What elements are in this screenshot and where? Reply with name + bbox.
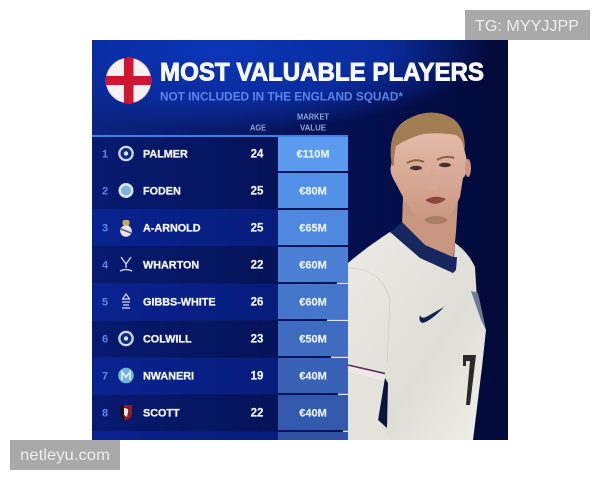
neck [402,195,458,262]
row 6: Colwill [102,331,327,346]
shirt [348,232,486,440]
row 6: Colwill: 23 [251,334,263,346]
row 3: A-Arnold: A-ARNOLD [143,222,201,234]
row 8: Scott: €40M [299,408,327,420]
panel: infographic background [92,40,508,440]
gap between arm and torso [378,378,388,428]
row 4: Wharton [102,257,327,272]
chin beard [425,216,447,224]
row 7: Nwaneri: 19 [251,370,263,382]
mouth [425,197,446,204]
icon: swoosh logo [419,307,444,323]
collar [390,222,457,273]
row 2: Foden [102,183,327,198]
row 2: Foden: €80M [299,186,327,198]
eyebrows [407,157,454,163]
row 3: A-Arnold: €65M [299,222,327,234]
row 8: Scott: 8 [102,408,108,420]
row 5: Gibbs-White [102,294,327,308]
row 1: Palmer: €110M [296,148,330,160]
row 6: Colwill: €50M [299,334,327,346]
icon: Marseille crest [118,368,134,383]
row 4: Wharton: WHARTON [143,260,199,272]
row 6: Colwill: COLWILL [143,334,192,346]
row 8: Scott [102,405,327,420]
icon: Manchester City crest [118,183,134,198]
row 3: A-Arnold [102,220,327,237]
row 5: Gibbs-White: €60M [299,296,327,308]
row 5: Gibbs-White: 5 [102,296,108,308]
row 7: Nwaneri: NWANERI [143,370,194,382]
row 3: A-Arnold: 3 [102,222,108,234]
watermark: netleyu.com [10,440,120,470]
icon: Chelsea crest [118,146,134,161]
watermark: netleyu.com: netleyu.com [20,447,110,464]
sleeve seam [348,268,390,363]
column header: market value [297,112,329,132]
player photo: footballer in white England shirt [348,112,486,440]
icon: Chelsea crest [118,331,134,346]
table rows [92,135,348,440]
sleeve stripes [348,365,385,381]
row 1: Palmer: 24 [251,148,264,160]
icon: Real Madrid crest [120,220,132,237]
ear [465,159,471,177]
row 6: Colwill: 6 [102,334,108,346]
row 7: Nwaneri [102,368,327,383]
title: MOST VALUABLE PLAYERS [160,58,484,86]
eyes [410,163,451,170]
row 5: Gibbs-White: GIBBS-WHITE [143,296,216,308]
row 1: Palmer [102,146,330,161]
row 5: Gibbs-White: 26 [251,296,263,308]
row 3: A-Arnold: 25 [251,222,264,234]
row 1: Palmer: 1 [102,148,108,160]
England badge [471,291,486,330]
row 7: Nwaneri: 7 [102,370,108,382]
column header: market value: VALUE [300,124,327,132]
row 2: Foden: 2 [102,186,108,198]
column header: age: AGE [250,124,267,132]
row 2: Foden: 25 [251,186,264,198]
hair [391,112,465,166]
icon: England flag [106,58,151,103]
face [390,120,468,226]
icon: Crystal Palace crest [120,257,132,271]
column header: market value: MARKET [297,112,329,122]
row 4: Wharton: 22 [251,260,263,272]
nose [426,170,439,190]
watermark: TG [465,10,590,40]
row 4: Wharton: €60M [299,260,327,272]
shirt number 7 [463,355,476,405]
row 4: Wharton: 4 [102,260,109,272]
shirt slivers between value cells [327,282,348,432]
row 1: Palmer: PALMER [143,148,188,160]
icon: Nottingham Forest crest [122,294,130,308]
watermark: TG: TG: MYYJJPP [475,18,579,35]
row 7: Nwaneri: €40M [299,370,327,382]
icon: Bournemouth crest [120,405,132,420]
row 8: Scott: 22 [251,408,263,420]
subtitle: NOT INCLUDED IN THE ENGLAND SQUAD* [160,90,403,104]
row 2: Foden: FODEN [143,186,181,198]
forearm [348,374,391,440]
row 8: Scott: SCOTT [143,408,180,420]
